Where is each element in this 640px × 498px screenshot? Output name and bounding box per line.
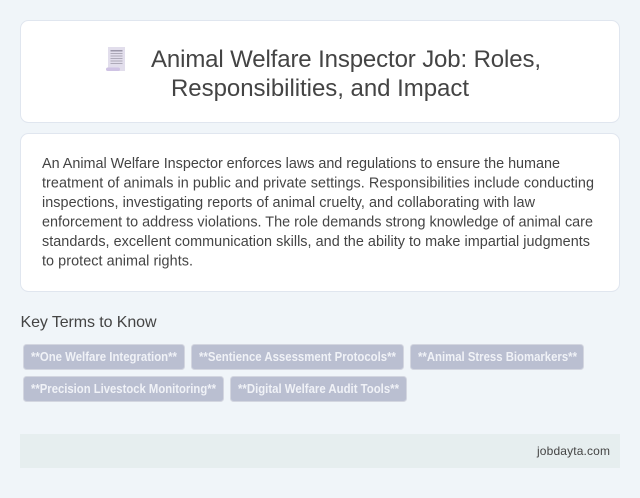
description text: to protect animal rights. (42, 254, 193, 270)
description text: standards, excellent communication skills, and the ability to make impartial judgments (42, 234, 590, 250)
tag: one welfare integration: **One Welfare Integration** (31, 349, 178, 364)
heading: key terms: Key Terms to Know (20, 314, 157, 331)
description text (42, 156, 594, 270)
tag: one welfare integration (24, 344, 184, 370)
description text: treatment of animals in public and private settings. Responsibilities include conducting (42, 176, 594, 192)
tag: precision livestock monitoring: **Precision Livestock Monitoring** (31, 381, 217, 396)
footer bar (20, 434, 620, 468)
footer source: jobdayta.com (536, 444, 610, 458)
tag: sentience assessment protocols (192, 344, 404, 370)
tag: digital welfare audit tools: **Digital Welfare Audit Tools** (238, 381, 400, 396)
title: Animal Welfare Inspector Job: Roles, (151, 46, 541, 73)
tag: precision livestock monitoring (24, 376, 224, 402)
tag: animal stress biomarkers: **Animal Stress Biomarkers** (418, 349, 578, 364)
description text: An Animal Welfare Inspector enforces laws and regulations to ensure the humane (42, 156, 560, 172)
icon: document scroll (106, 47, 125, 71)
description text: inspections, investigating reports of animal cruelty, and collaborating with law (42, 195, 536, 211)
title: Responsibilities, and Impact (171, 75, 469, 102)
tag: animal stress biomarkers (410, 344, 584, 370)
tag: digital welfare audit tools (230, 376, 406, 402)
description text: enforcement to address violations. The role demands strong knowledge of animal care (42, 214, 593, 230)
panel: description card (20, 134, 620, 292)
tag list (24, 344, 584, 402)
title (151, 46, 541, 102)
tag: sentience assessment protocols: **Sentience Assessment Protocols** (199, 349, 397, 364)
panel: title card (20, 20, 620, 122)
